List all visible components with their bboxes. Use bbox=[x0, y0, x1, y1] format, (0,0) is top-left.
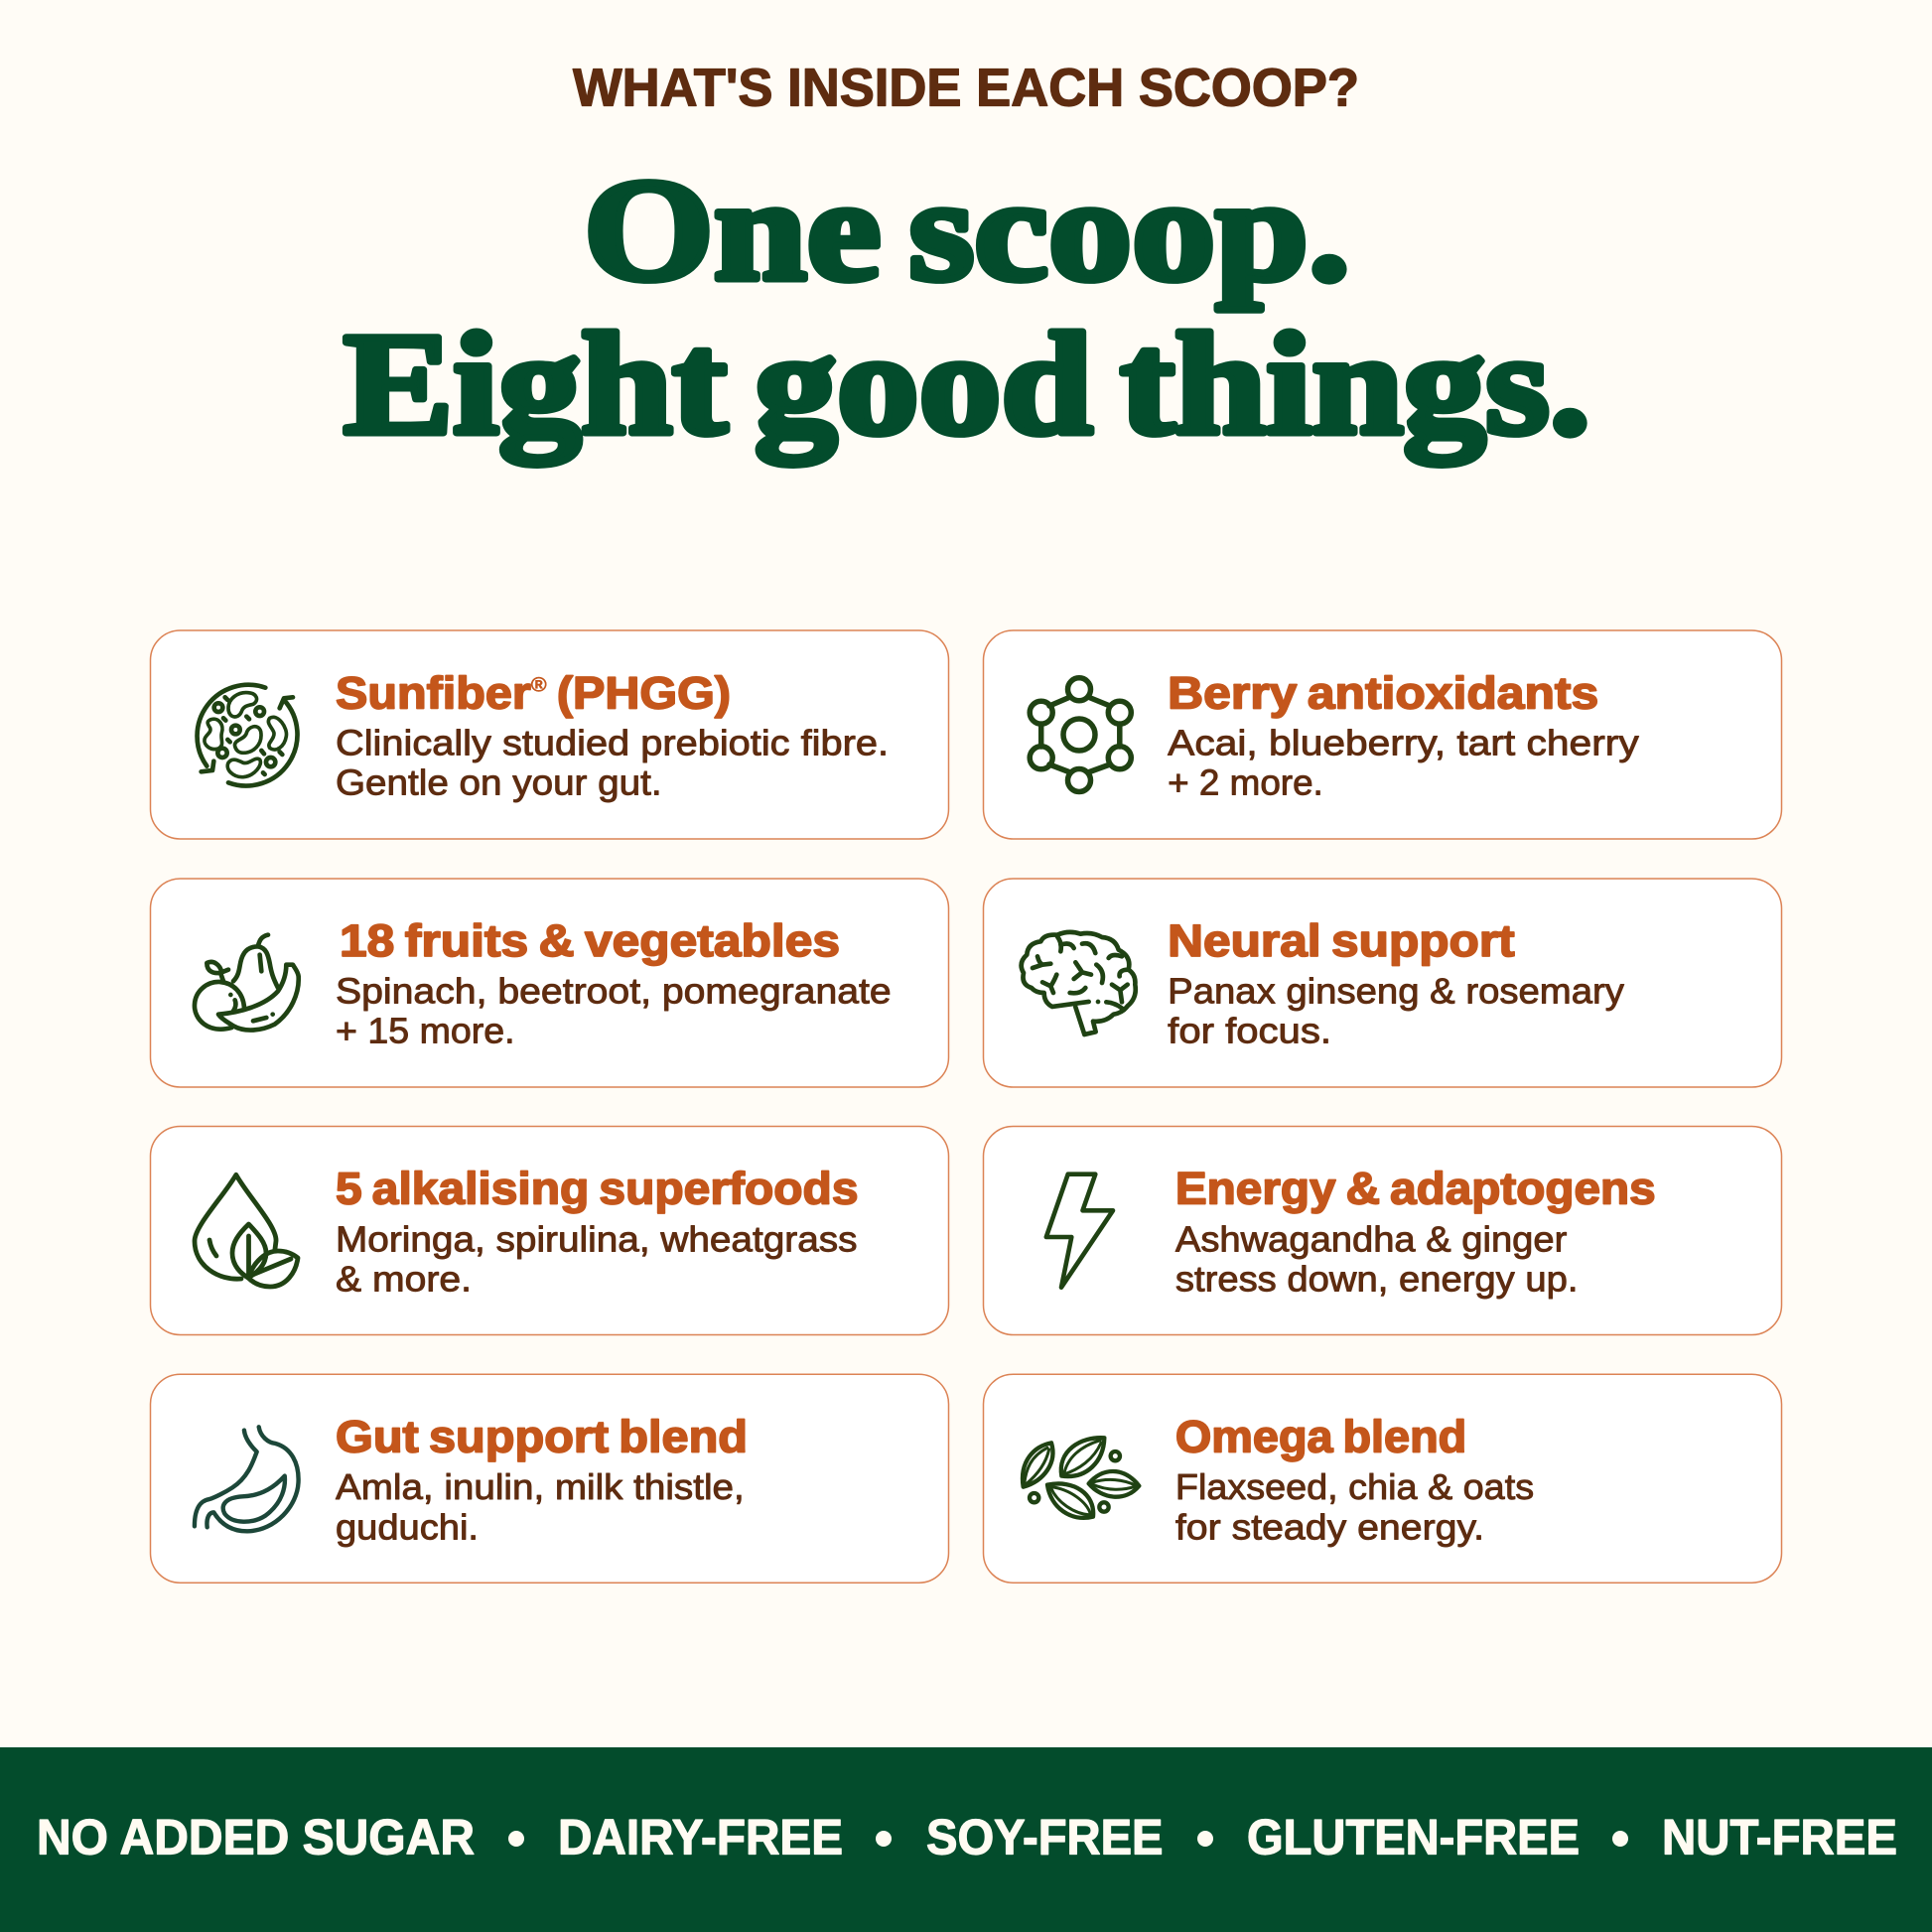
description: Spinach, beetroot, pomegranate bbox=[336, 971, 892, 1011]
panel: Omega blend bbox=[983, 1374, 1781, 1583]
description: Panax ginseng & rosemary bbox=[1168, 971, 1624, 1011]
description: guduchi. bbox=[336, 1506, 479, 1547]
description bbox=[1175, 1466, 1534, 1547]
footer band: free-from claims bbox=[0, 1747, 1932, 1932]
footer band: free-from claims: DAIRY-FREE bbox=[558, 1809, 843, 1864]
title: Eight good things. bbox=[344, 303, 1590, 465]
footer band: free-from claims: SOY-FREE bbox=[926, 1809, 1164, 1864]
title: One scoop. bbox=[584, 149, 1350, 311]
footer band: free-from claims: NUT-FREE bbox=[1662, 1809, 1897, 1864]
description bbox=[336, 1219, 858, 1300]
heading: Omega blend bbox=[1175, 1411, 1466, 1461]
description: Flaxseed, chia & oats bbox=[1175, 1466, 1534, 1507]
icon: seeds bbox=[1023, 1438, 1139, 1518]
heading: ® bbox=[531, 675, 547, 697]
description: Ashwagandha & ginger bbox=[1175, 1219, 1567, 1259]
description: for focus. bbox=[1168, 1011, 1331, 1051]
icon: molecule bbox=[1030, 678, 1131, 792]
footer band: free-from claims: NO ADDED SUGAR bbox=[37, 1809, 475, 1864]
heading: Sunfiber bbox=[336, 667, 517, 719]
icon: fibre beans in circular arrows bbox=[198, 685, 298, 786]
panel: Berry antioxidants bbox=[983, 630, 1781, 839]
description bbox=[336, 723, 889, 803]
heading: Energy & adaptogens bbox=[1175, 1164, 1656, 1214]
description: for steady energy. bbox=[1175, 1506, 1484, 1547]
panel: 5 alkalising superfoods bbox=[151, 1126, 949, 1334]
icon: lightning bolt bbox=[1046, 1174, 1113, 1288]
panel: Gut support blend bbox=[151, 1374, 949, 1583]
heading: Neural support bbox=[1168, 915, 1515, 966]
panel: Sunfiber bbox=[151, 630, 949, 839]
icon: drop with leaves bbox=[195, 1174, 298, 1287]
description: & more. bbox=[336, 1259, 472, 1300]
panel: Neural support bbox=[983, 879, 1781, 1087]
heading: (PHGG) bbox=[547, 667, 731, 719]
description: Clinically studied prebiotic fibre. bbox=[336, 723, 889, 762]
description: Gentle on your gut. bbox=[336, 762, 662, 803]
description bbox=[336, 971, 892, 1051]
description: Acai, blueberry, tart cherry bbox=[1168, 723, 1639, 762]
description: + 15 more. bbox=[336, 1011, 515, 1051]
description bbox=[1168, 971, 1624, 1051]
panel: Energy and adaptogens bbox=[983, 1126, 1781, 1334]
description: Moringa, spirulina, wheatgrass bbox=[336, 1219, 858, 1259]
heading: Gut support blend bbox=[336, 1411, 748, 1461]
heading: 5 alkalising superfoods bbox=[336, 1164, 858, 1214]
description: Amla, inulin, milk thistle, bbox=[336, 1466, 745, 1507]
icon: brain bbox=[1022, 932, 1136, 1035]
description bbox=[1175, 1219, 1579, 1300]
description: stress down, energy up. bbox=[1175, 1259, 1579, 1300]
description bbox=[336, 1466, 745, 1547]
footer band: free-from claims: GLUTEN-FREE bbox=[1247, 1809, 1580, 1864]
icon: fruits bbox=[195, 935, 299, 1031]
panel: 18 fruits and vegetables bbox=[151, 879, 949, 1087]
description bbox=[1168, 723, 1639, 803]
heading: Berry antioxidants bbox=[1168, 667, 1598, 719]
heading: 18 fruits & vegetables bbox=[340, 915, 840, 966]
title bbox=[344, 149, 1590, 465]
description: + 2 more. bbox=[1168, 762, 1323, 803]
eyebrow heading: WHAT'S INSIDE EACH SCOOP? bbox=[573, 58, 1359, 117]
icon: stomach bbox=[195, 1427, 299, 1531]
